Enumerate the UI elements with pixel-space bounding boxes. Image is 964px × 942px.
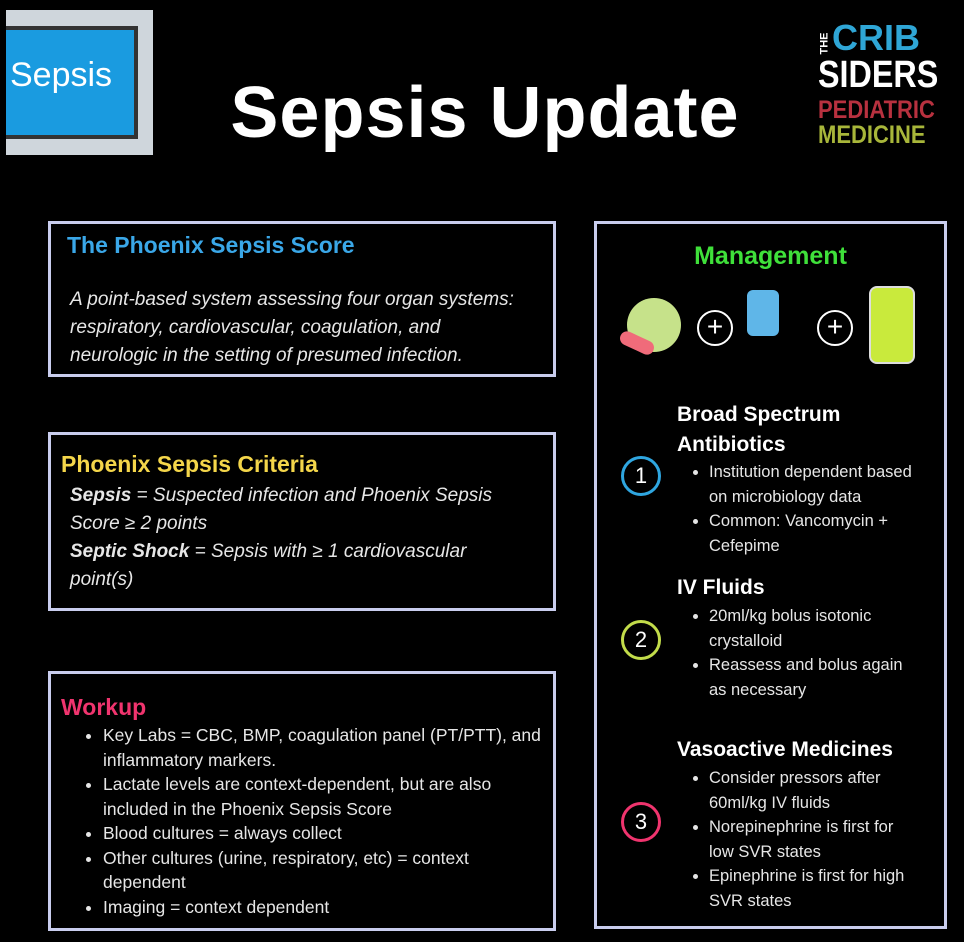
panel: management: Broad Spectrum Antibiotics — [677, 403, 840, 456]
icon: fluid bag — [869, 286, 915, 364]
list: Key Labs = CBC, BMP, coagulation panel (PT/PTT), and inflammatory markers. — [103, 725, 541, 770]
icon: antibiotics — [627, 298, 681, 352]
logo: MEDICINE — [818, 121, 926, 149]
icon: iv bag — [747, 290, 779, 336]
icon: plus: + — [827, 311, 843, 342]
icon: plus — [697, 310, 733, 346]
heading: Phoenix Sepsis Criteria — [61, 451, 318, 477]
panel: management: 2 — [635, 627, 647, 652]
panel: management: Vasoactive Medicines — [677, 738, 893, 761]
title: Sepsis Update — [230, 73, 740, 153]
panel: management: 3 — [635, 809, 647, 834]
logo: PEDIATRIC — [818, 96, 935, 124]
panel: management: Consider pressors after 60ml/kg IV fluids — [709, 769, 880, 812]
heading: Workup — [61, 694, 146, 720]
panel: management: IV Fluids — [677, 576, 765, 599]
panel: phoenix score — [48, 221, 556, 377]
logo: SIDERS — [818, 54, 938, 96]
list: Lactate levels are context-dependent, but are also included in the Phoenix Sepsis Score — [103, 774, 491, 818]
logo: THE — [818, 32, 830, 54]
section 2 — [621, 576, 903, 698]
icon: plus — [817, 310, 853, 346]
panel: management: 20ml/kg bolus isotonic crystalloid — [709, 607, 871, 650]
panel: management: Reassess and bolus again as necessary — [709, 656, 903, 698]
panel: management — [594, 221, 947, 929]
logo: CRIB — [832, 17, 920, 58]
panel: management: Norepinephrine is first for low SVR states — [709, 818, 893, 860]
panel: management: 1 — [635, 463, 647, 488]
text: A point-based system assessing four organ systems: respiratory, cardiovascular, coagulation, and neurologic in the setting of presumed infection. — [70, 289, 514, 366]
panel: management: Common: Vancomycin + Cefepime — [709, 512, 888, 554]
text: Sepsis = Suspected infection and Phoenix Sepsis Score ≥ 2 points — [70, 485, 492, 534]
panel: workup — [48, 671, 556, 931]
panel: management: Epinephrine is first for high SVR states — [709, 867, 904, 910]
list: Blood cultures = always collect — [103, 823, 342, 843]
section 1 — [621, 403, 912, 554]
list: Other cultures (urine, respiratory, etc) = context dependent — [103, 848, 469, 892]
panel: management: Institution dependent based on microbiology data — [709, 463, 912, 506]
text — [70, 485, 492, 590]
list: Imaging = context dependent — [103, 896, 329, 916]
panel: criteria — [48, 432, 556, 611]
text: Septic Shock = Sepsis with ≥ 1 cardiovascular point(s) — [70, 541, 466, 590]
image: sepsis tablet: Sepsis — [10, 56, 112, 94]
section 3 — [621, 738, 904, 910]
icon: plus: + — [707, 311, 723, 342]
image: sepsis tablet — [6, 10, 153, 155]
heading: Management — [694, 242, 847, 270]
list — [86, 725, 541, 916]
logo — [818, 17, 938, 149]
heading: The Phoenix Sepsis Score — [67, 232, 355, 258]
